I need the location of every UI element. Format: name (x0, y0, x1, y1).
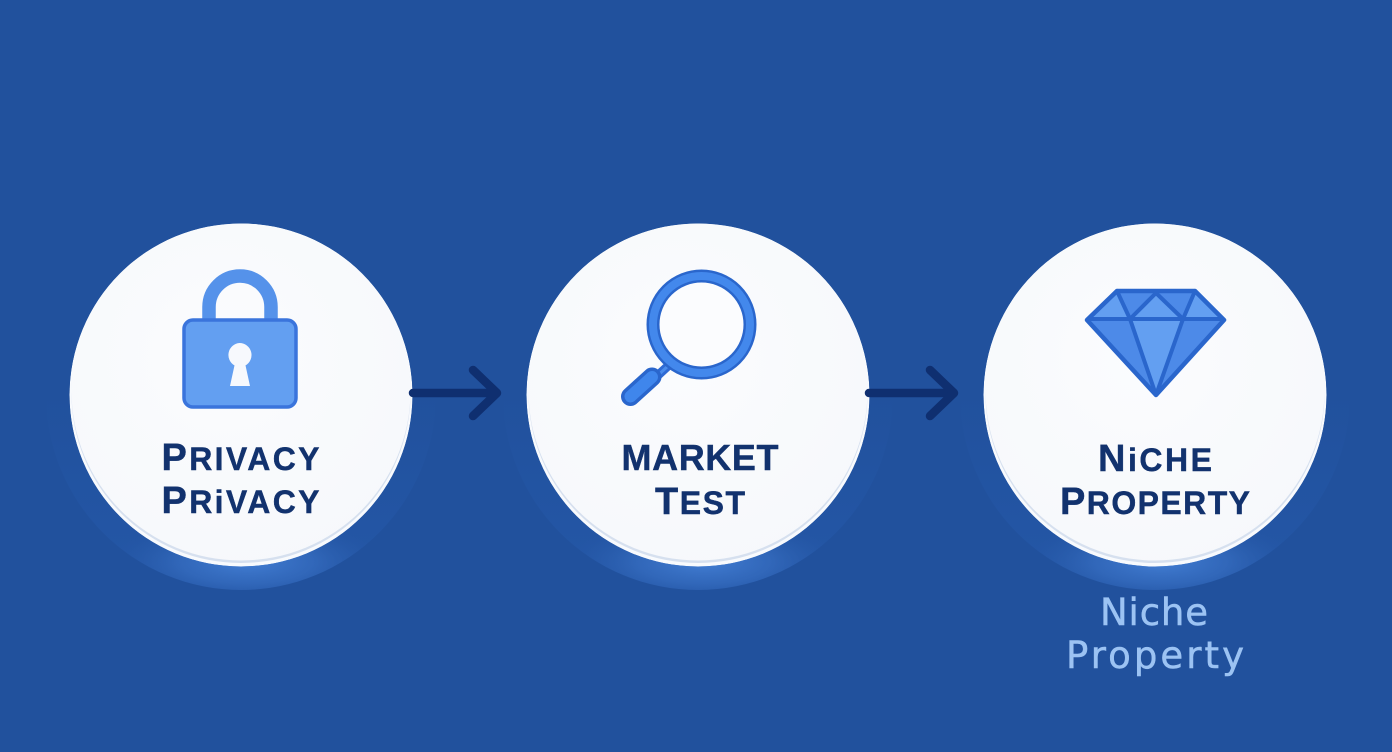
label: test: TEST (655, 481, 745, 523)
caption: property: Property (1066, 634, 1244, 677)
label: privacy first line: PRIVACY (162, 437, 320, 479)
label: niche: NiCHE (1098, 438, 1212, 480)
panel: privacy step (70, 224, 412, 590)
label: market: MARKET (622, 437, 778, 478)
panel: niche property step (984, 224, 1326, 590)
icon: diamond (1087, 291, 1224, 395)
label: privacy second line: PRiVACY (162, 480, 320, 522)
panel: market test step (526, 224, 870, 590)
infographic canvas (70, 224, 1326, 676)
label: property: PROPERTY (1060, 481, 1250, 523)
arrow: privacy to market test (413, 370, 497, 416)
caption: niche: Niche (1100, 591, 1208, 634)
arrow: market test to niche property (869, 370, 954, 416)
icon: padlock (184, 276, 296, 407)
icon: magnifying glass (630, 276, 750, 396)
